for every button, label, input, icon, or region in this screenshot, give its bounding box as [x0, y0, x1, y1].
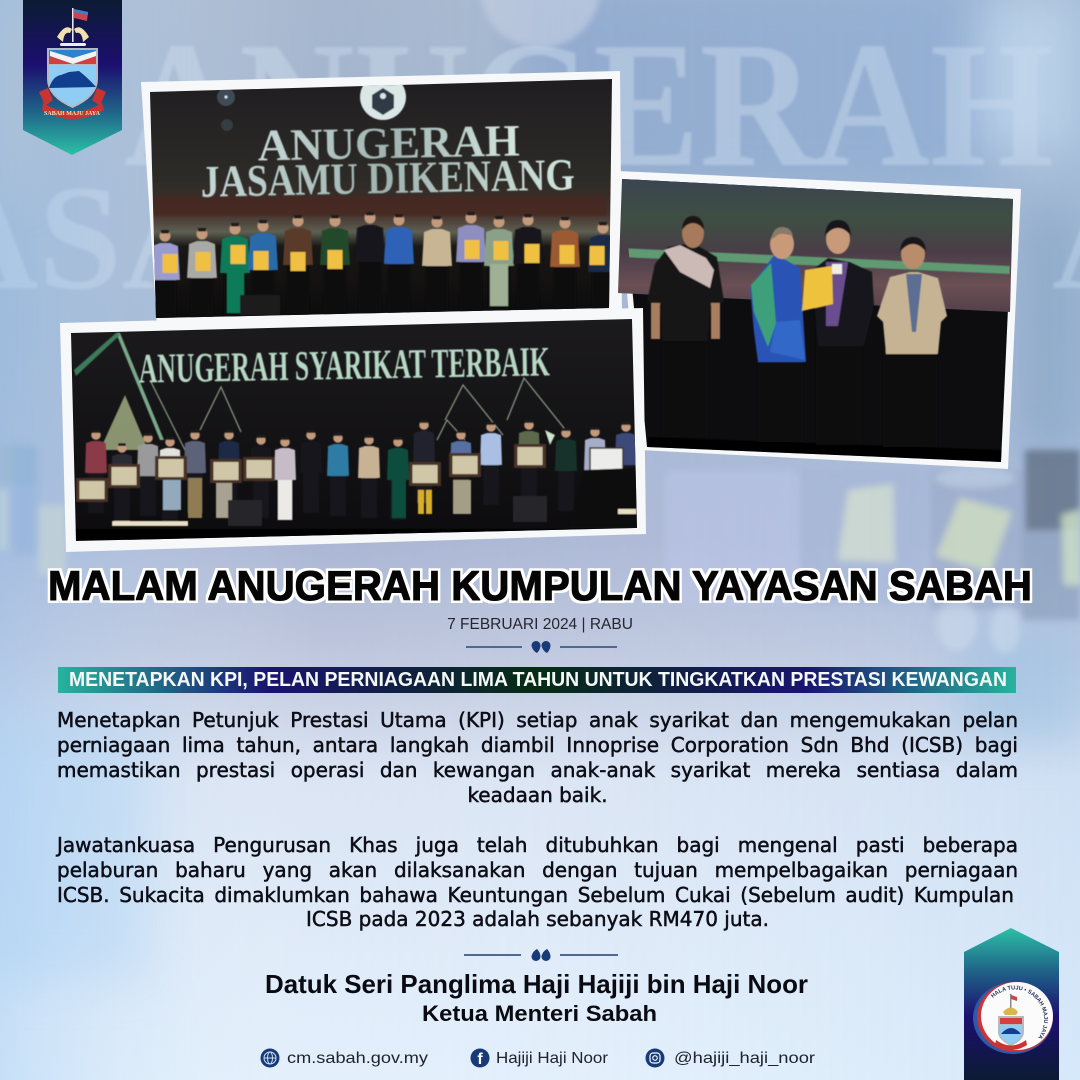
title: MALAM ANUGERAH KUMPULAN YAYASAN SABAH [48, 562, 1032, 609]
person: right, beige blazer [877, 237, 947, 447]
paragraph 2 [56, 833, 1018, 931]
photo: stage handover [617, 171, 1021, 469]
yellow folder [802, 266, 833, 311]
paragraph 2: Jawatankuasa Pengurusan Khas juga telah ditubuhkan bagi mengenal pasti beberapa [57, 833, 1018, 857]
icon: facebook [470, 1048, 490, 1068]
paragraph 1 [57, 708, 1018, 807]
paragraph 1: keadaan baik. [467, 783, 608, 807]
paragraph 2: ICSB pada 2023 adalah sebanyak RM470 juta. [306, 907, 769, 931]
paragraph 2: pelaburan baharu yang akan dilaksanakan dengan tujuan mempelbagaikan perniagaan [57, 858, 1018, 882]
screen heading: ANUGERAH [257, 115, 520, 171]
state crest: SABAH MAJU JAYA [44, 111, 101, 117]
circular emblem [973, 982, 1053, 1054]
paragraph 1: memastikan prestasi operasi dan kewangan anak-anak syarikat mereka sentiasa dalam [57, 758, 1018, 782]
paragraph 1: Menetapkan Petunjuk Prestasi Utama (KPI) setiap anak syarikat dan mengemukakan pelan [57, 708, 1018, 732]
paragraph 2: ICSB. Sukacita dimaklumkan bahawa Keuntungan Sebelum Cukai (Sebelum audit) Kumpulan [57, 883, 1014, 907]
award recipients with certificates [76, 420, 637, 540]
person: recipient, black jacket [812, 220, 874, 445]
screen heading: ANUGERAH SYARIKAT TERBAIK [138, 339, 550, 393]
person: Chief Minister, blue batik shirt [750, 227, 806, 442]
body paragraphs [56, 708, 1018, 931]
circular emblem: HALA TUJU • SABAH MAJU JAYA [990, 986, 1048, 1038]
speaker name: Datuk Seri Panglima Haji Hajiji bin Haji Noor [265, 969, 808, 999]
icon: website globe [260, 1048, 280, 1068]
photo: Anugerah Jasamu Dikenang [141, 71, 622, 340]
quote divider [466, 641, 617, 653]
instagram handle: @hajiji_haji_noor [674, 1050, 816, 1067]
website address: cm.sabah.gov.my [287, 1050, 428, 1067]
icon: instagram [646, 1048, 664, 1068]
icon: facebook: f [477, 1051, 483, 1068]
photo: Anugerah Syarikat Terbaik [60, 308, 646, 552]
date: 7 FEBRUARI 2024 | RABU [447, 616, 633, 633]
facebook name: Hajiji Haji Noor [496, 1050, 609, 1067]
photo collage [60, 71, 1021, 552]
speaker role: Ketua Menteri Sabah [422, 1001, 657, 1026]
screen heading: JASAMU DIKENANG [200, 149, 575, 207]
closing quote divider [464, 949, 618, 961]
paragraph 1: perniagaan lima tahun, antara langkah diambil Innoprise Corporation Sdn Bhd (ICSB) bagi [57, 733, 1018, 757]
subheading bar: MENETAPKAN KPI, PELAN PERNIAGAAN LIMA TAHUN UNTUK TINGKATKAN PRESTASI KEWANGAN [69, 669, 1007, 691]
screen heading [202, 125, 574, 198]
person: left, black batik shirt [648, 216, 724, 341]
logo circle [359, 85, 407, 121]
state crest [39, 8, 106, 119]
award recipients [154, 212, 610, 318]
